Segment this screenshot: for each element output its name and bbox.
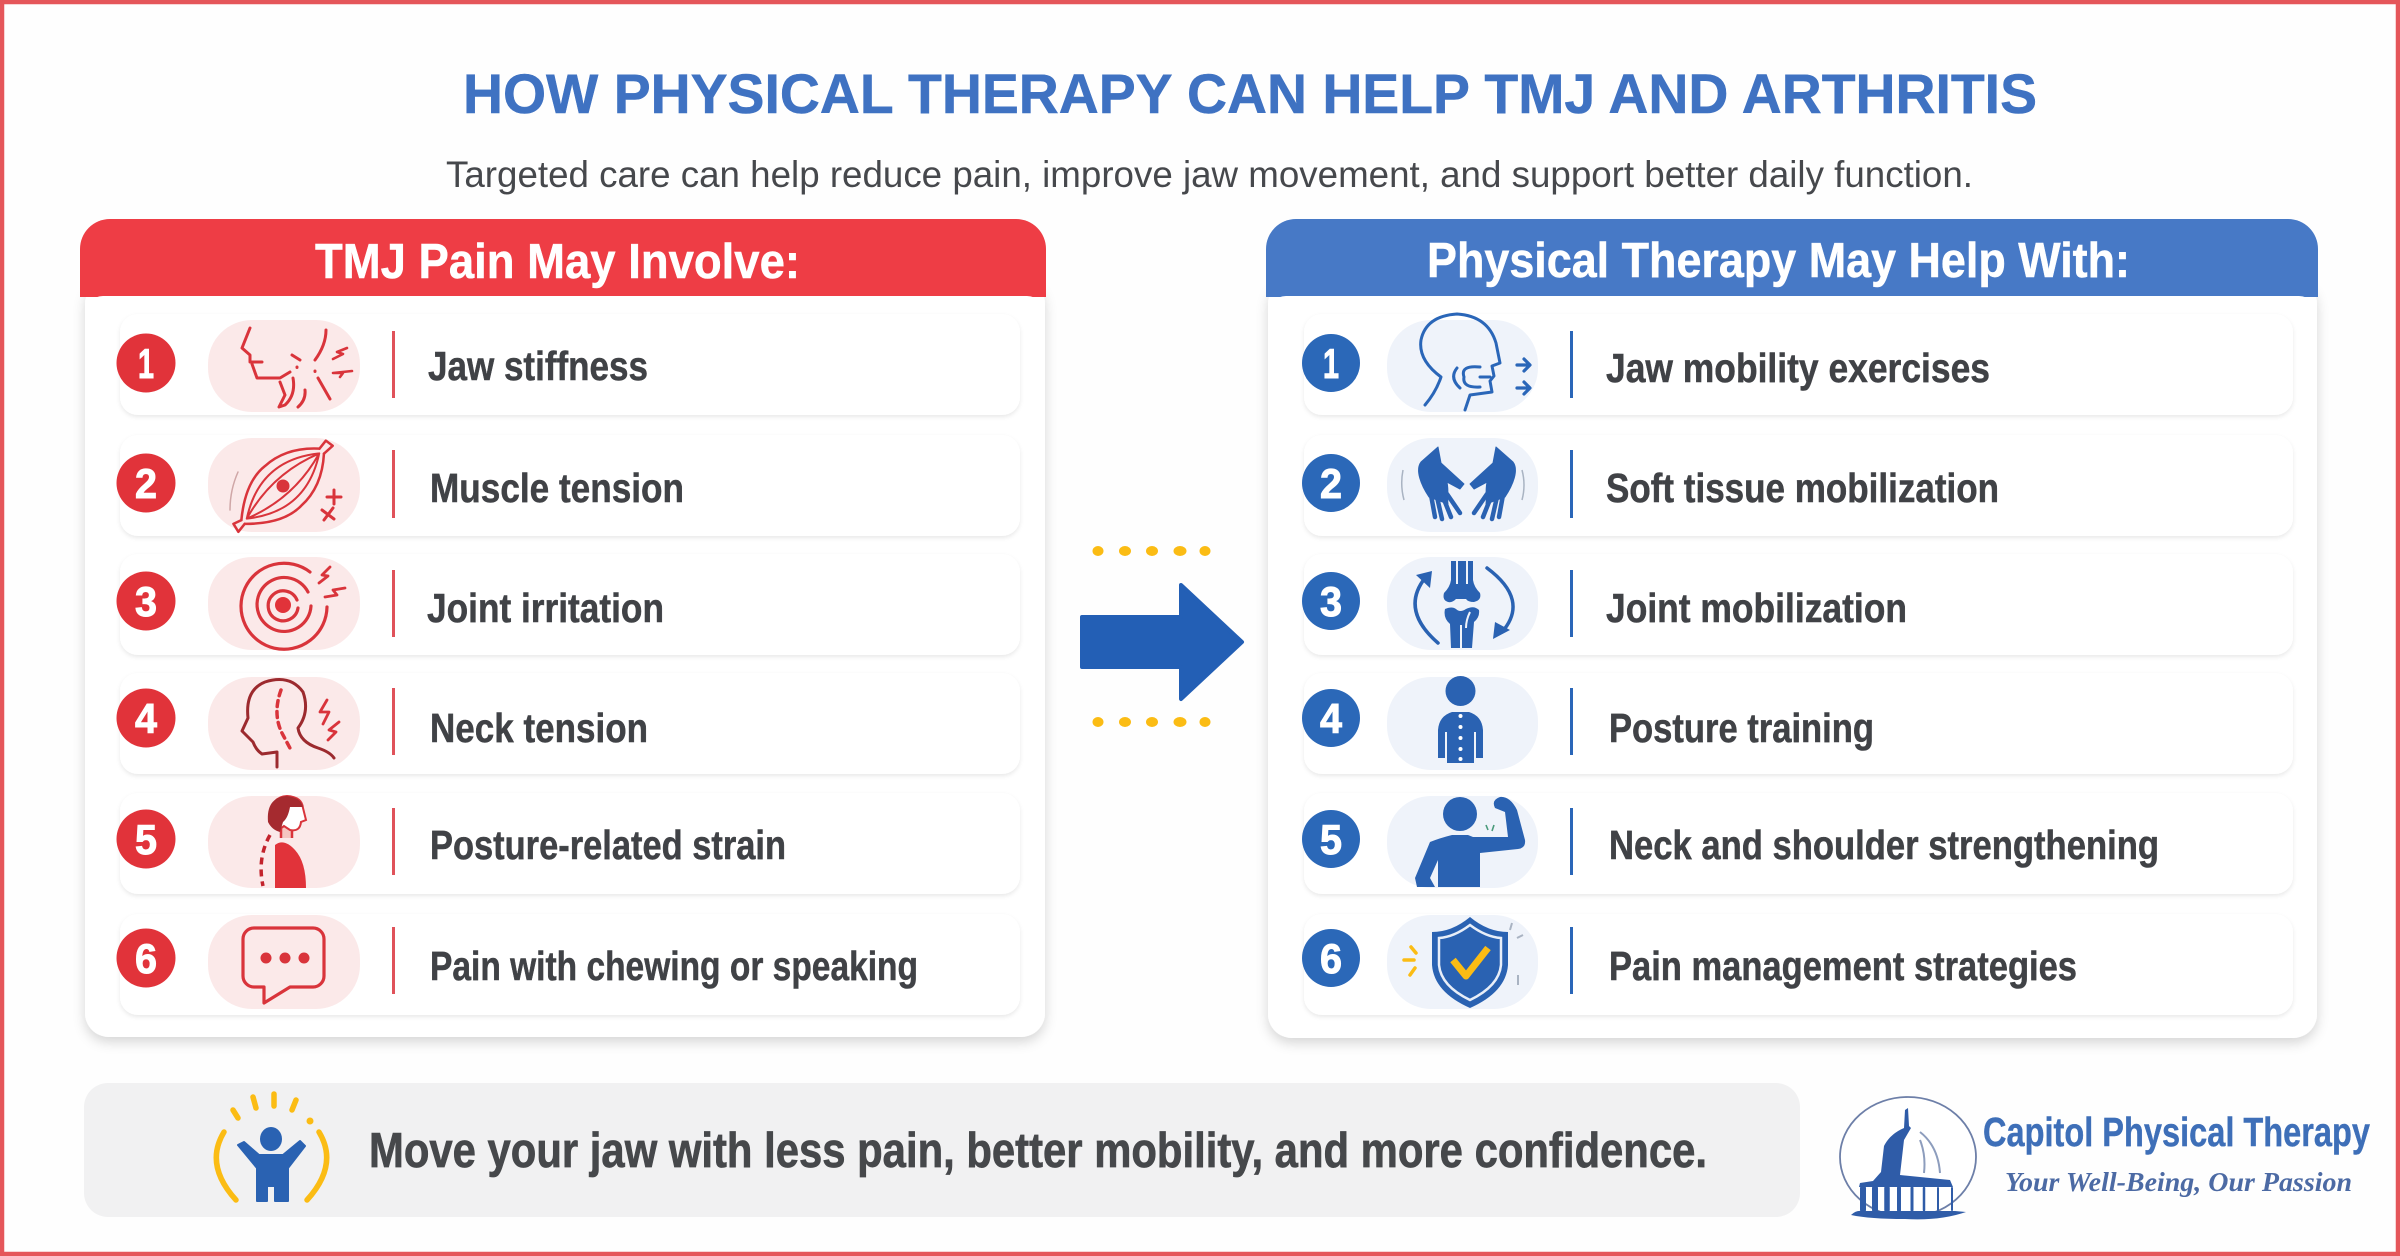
row 6: pain management strategies [1302, 914, 2293, 1015]
row 1: jaw mobility exercises: 1 [1323, 340, 1339, 387]
row 6: pain management strategies: Pain management strategies [1609, 943, 2077, 989]
row 2: soft tissue mobilization: Soft tissue mobilization [1606, 465, 1999, 511]
row 2: muscle tension: 2 [135, 460, 157, 507]
icon: posture figure [1438, 676, 1483, 763]
logo emblem [1840, 1097, 1976, 1219]
arrow with dotted accents [1082, 546, 1242, 727]
row 5: neck and shoulder strengthening: Neck and shoulder strengthening [1609, 822, 2159, 868]
row 5: posture-related strain [116, 793, 1020, 894]
panel heading: physical therapy: Physical Therapy May Help With: [1427, 234, 2130, 288]
row 4: neck tension: Neck tension [430, 705, 648, 751]
icon: muscle [218, 423, 348, 549]
icon: shield with check [1404, 917, 1523, 1008]
icon: speech bubble [243, 928, 324, 1003]
row 6: pain with chewing or speaking: 6 [135, 935, 157, 982]
row 5: neck and shoulder strengthening [1302, 793, 2293, 894]
row 3: joint mobilization [1302, 554, 2293, 655]
row 2: muscle tension [116, 423, 1020, 549]
row 1: jaw mobility exercises: Jaw mobility exercises [1606, 345, 1990, 391]
banner text: Move your jaw with less pain, better mobility, and more confidence. [369, 1124, 1707, 1178]
row 3: joint irritation: 3 [135, 578, 157, 625]
row 5: posture-related strain: Posture-related strain [430, 822, 786, 868]
row 1: jaw stiffness: Jaw stiffness [428, 343, 648, 389]
icon: posture figure [261, 796, 306, 888]
row 1: jaw stiffness: 1 [138, 340, 154, 387]
icon: head with jaw arrows [1421, 314, 1530, 410]
row 3: joint mobilization: Joint mobilization [1606, 585, 1907, 631]
logo: Capitol Physical Therapy [1840, 1097, 2370, 1219]
title: HOW PHYSICAL THERAPY CAN HELP TMJ AND ARTHRITIS [463, 62, 2037, 125]
icon: hands [1402, 447, 1524, 519]
panel heading: TMJ: TMJ Pain May Involve: [315, 235, 800, 289]
row 1: jaw stiffness [116, 314, 1020, 415]
bottom banner [84, 1083, 1800, 1217]
icon: strength figure [1415, 797, 1525, 887]
row 5: posture-related strain: 5 [135, 816, 157, 863]
icon: person with raised arms [216, 1094, 327, 1201]
row 4: neck tension [116, 673, 1020, 774]
logo tagline: Your Well-Being, Our Passion [2005, 1167, 2352, 1197]
icon: target irritation [241, 563, 345, 649]
row 4: neck tension: 4 [135, 695, 158, 742]
row 1: jaw mobility exercises [1302, 314, 2293, 415]
row 6: pain management strategies: 6 [1320, 935, 1342, 982]
row 6: pain with chewing or speaking: Pain with chewing or speaking [430, 943, 918, 989]
row 2: soft tissue mobilization [1302, 435, 2293, 536]
row 3: joint irritation: Joint irritation [427, 585, 664, 631]
icon: joint with arrows [1415, 561, 1513, 648]
row 4: posture training: Posture training [1609, 705, 1874, 751]
row 2: muscle tension: Muscle tension [430, 465, 684, 511]
panel: TMJ pain may involve [80, 219, 1046, 1037]
icon: neck tension [242, 680, 339, 767]
subtitle: Targeted care can help reduce pain, improve jaw movement, and support better daily function. [446, 154, 1973, 195]
row 3: joint irritation [116, 554, 1020, 655]
row 4: posture training: 4 [1320, 695, 1343, 742]
row 6: pain with chewing or speaking [116, 914, 1020, 1015]
row 3: joint mobilization: 3 [1320, 578, 1342, 625]
row 2: soft tissue mobilization: 2 [1320, 460, 1342, 507]
row 4: posture training [1302, 673, 2293, 774]
icon: jaw pain [242, 328, 352, 407]
row 5: neck and shoulder strengthening: 5 [1320, 816, 1342, 863]
panel: physical therapy may help with [1266, 219, 2318, 1038]
